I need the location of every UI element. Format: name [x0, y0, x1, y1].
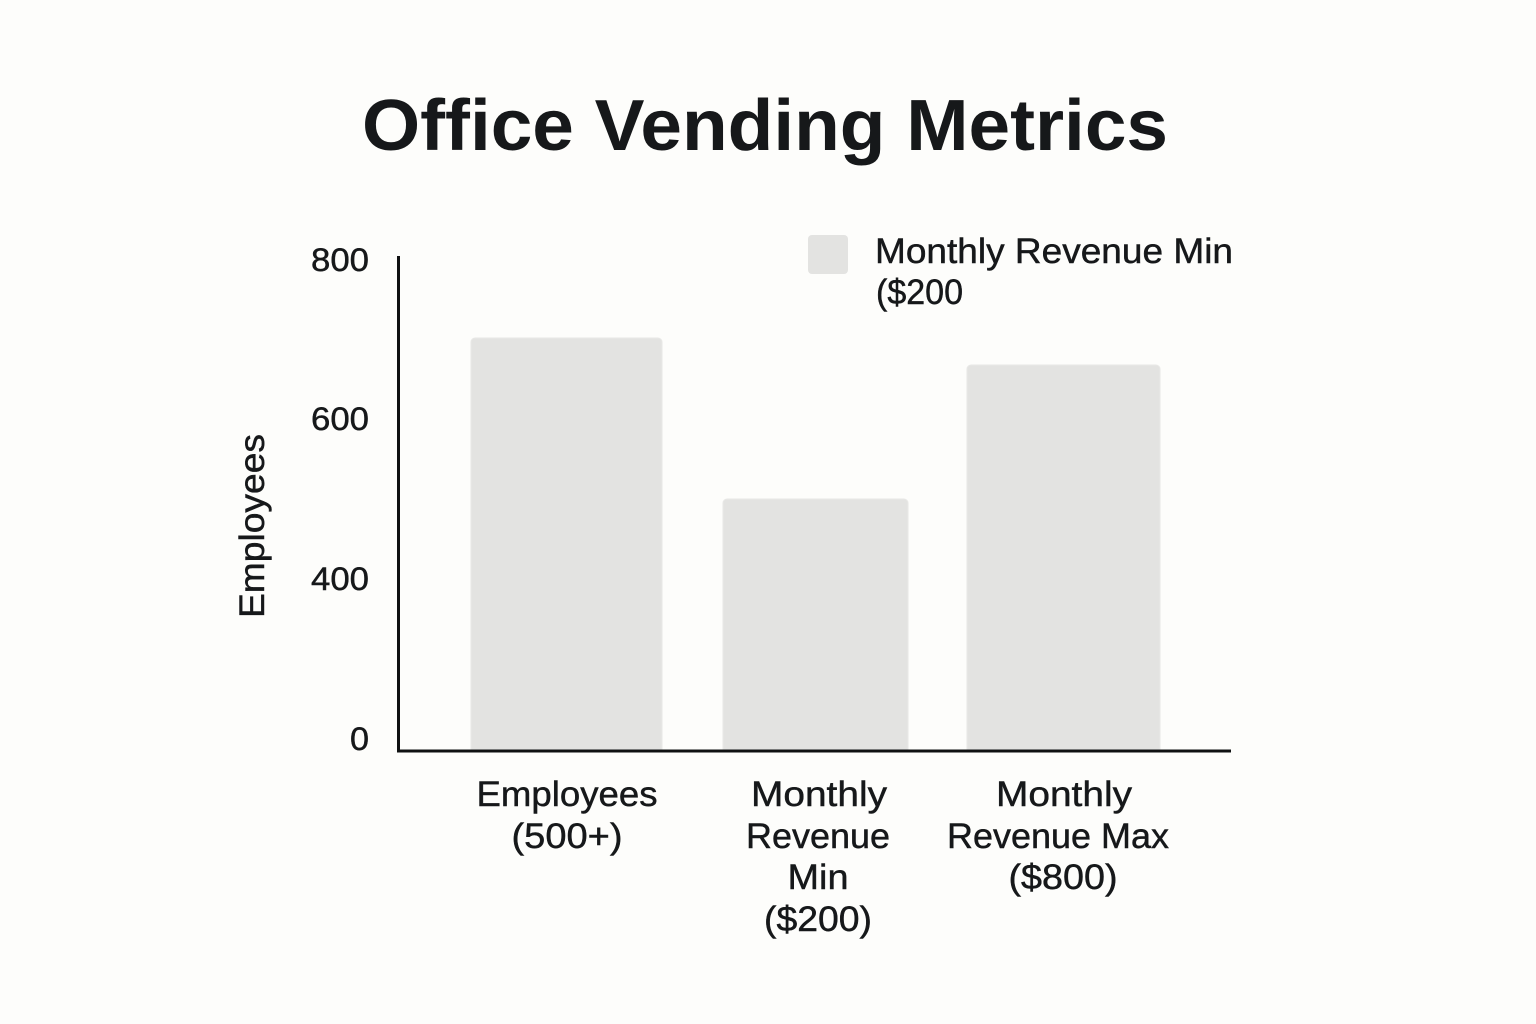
title: Office Vending Metrics — [362, 86, 1168, 166]
x label: Monthly Revenue Min ($200) — [746, 775, 890, 939]
x label: Monthly Revenue Min ($200): Revenue — [746, 817, 890, 856]
bar: Employees (500+) — [471, 338, 662, 750]
x label: Monthly Revenue Min ($200): Monthly — [751, 775, 888, 814]
y axis tick labels: 0 — [350, 721, 369, 757]
x label: Employees (500+): Employees — [476, 775, 658, 814]
y axis tick labels: 600 — [311, 401, 369, 437]
axes — [398, 256, 1231, 751]
y axis title: Employees — [233, 434, 272, 618]
x label: Monthly Revenue Max ($800): ($800) — [1008, 858, 1118, 897]
x label: Monthly Revenue Min ($200): ($200) — [764, 900, 872, 939]
legend — [808, 232, 1233, 312]
x label: Employees (500+) — [476, 775, 658, 856]
bar: Monthly Revenue Max ($800) — [967, 365, 1160, 750]
legend label: ($200 — [876, 273, 963, 312]
y axis tick labels: 800 — [311, 242, 369, 278]
bar chart — [233, 232, 1233, 939]
y axis tick labels — [311, 242, 369, 757]
x label: Employees (500+): (500+) — [512, 817, 622, 856]
legend label: Monthly Revenue Min — [875, 232, 1233, 271]
bar: Monthly Revenue Min ($200) — [723, 499, 908, 750]
y axis tick labels: 400 — [311, 561, 369, 597]
x label: Monthly Revenue Max ($800): Monthly — [996, 775, 1133, 814]
legend label — [875, 232, 1233, 312]
legend swatch — [808, 235, 848, 274]
x label: Monthly Revenue Min ($200): Min — [788, 858, 848, 897]
x label: Monthly Revenue Max ($800) — [947, 775, 1170, 897]
x label: Monthly Revenue Max ($800): Revenue Max — [947, 817, 1170, 856]
